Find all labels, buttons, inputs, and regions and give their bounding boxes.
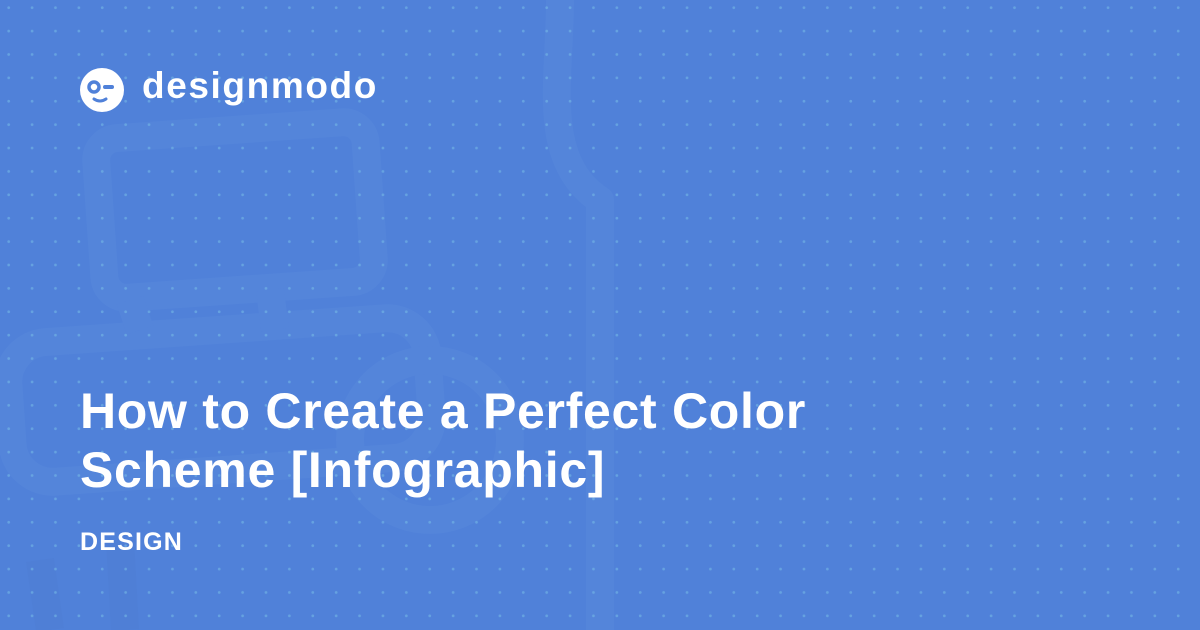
- logo text: designmodo: [142, 65, 378, 106]
- category label: DESIGN: [80, 528, 183, 556]
- title: [80, 383, 806, 498]
- logo: designmodo: [80, 65, 378, 112]
- icon: face logo: [80, 68, 124, 112]
- title: How to Create a Perfect Color: [80, 383, 806, 439]
- title: Scheme [Infographic]: [80, 442, 605, 498]
